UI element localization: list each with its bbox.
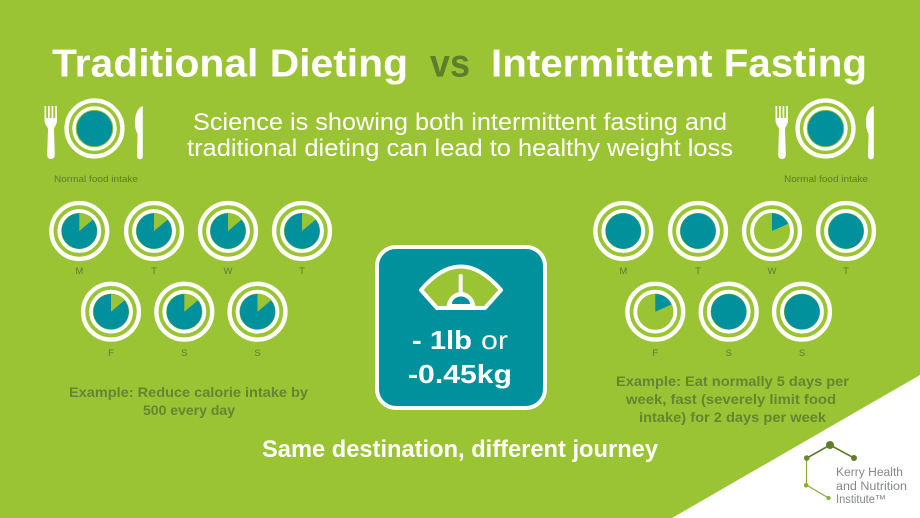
- logo text: and Nutrition: [836, 481, 907, 493]
- Tuesday plate: [126, 203, 182, 277]
- Friday fasting plate: [627, 284, 683, 359]
- Sunday plate: [230, 284, 285, 359]
- subtitle text: [187, 109, 733, 162]
- icon: right plate and cutlery: [776, 101, 874, 159]
- Wednesday plate: [200, 203, 256, 277]
- Thursday plate: T: [299, 266, 305, 277]
- Sunday plate: [774, 284, 830, 359]
- right example text: week, fast (severely limit food: [625, 391, 836, 407]
- panel: traditional dieting week: [51, 203, 330, 359]
- right example text: [616, 373, 850, 425]
- subtitle text: traditional dieting can lead to healthy weight loss: [187, 135, 733, 162]
- Monday plate: M: [619, 266, 627, 277]
- Monday plate: [595, 203, 651, 277]
- Saturday plate: S: [726, 348, 732, 359]
- logo mark: [804, 441, 857, 500]
- Tuesday plate: T: [695, 266, 701, 277]
- Thursday plate: [274, 203, 330, 277]
- title: [52, 42, 867, 86]
- Wednesday fasting plate: [744, 203, 800, 277]
- right normal food intake label: Normal food intake: [784, 174, 868, 185]
- Friday plate: F: [108, 348, 114, 359]
- title: Intermittent Fasting: [491, 42, 867, 86]
- weight loss value: -0.45kg: [408, 359, 512, 389]
- logo text: Kerry Health: [836, 467, 903, 479]
- logo: Kerry Health and Nutrition Institute: [804, 441, 907, 506]
- weight loss value: - 1lb: [412, 325, 472, 355]
- Friday fasting plate: F: [652, 348, 658, 359]
- Monday plate: [51, 203, 107, 277]
- Thursday plate: [818, 203, 874, 277]
- logo text: Institute™: [836, 494, 886, 506]
- Friday plate: [83, 284, 139, 359]
- title: Traditional Dieting: [52, 42, 408, 86]
- Wednesday fasting plate: W: [768, 266, 777, 277]
- icon: left plate and cutlery: [44, 101, 143, 159]
- Sunday plate: S: [254, 348, 261, 359]
- weight loss value: or: [481, 325, 508, 355]
- title: vs: [430, 42, 470, 86]
- tagline: Same destination, different journey: [262, 436, 659, 463]
- Monday plate: M: [75, 266, 83, 277]
- left normal food intake label: Normal food intake: [54, 174, 138, 185]
- right example text: intake) for 2 days per week: [639, 409, 826, 425]
- panel: weight loss scale: [377, 247, 545, 408]
- Tuesday plate: T: [151, 266, 157, 277]
- right example text: Example: Eat normally 5 days per: [616, 373, 850, 389]
- left example text: 500 every day: [143, 402, 235, 418]
- Thursday plate: T: [843, 266, 849, 277]
- left example text: [69, 384, 308, 418]
- left example text: Example: Reduce calorie intake by: [69, 384, 308, 400]
- Saturday plate: S: [181, 348, 187, 359]
- white corner triangle: [672, 375, 920, 518]
- panel: intermittent fasting week: [595, 203, 874, 359]
- Saturday plate: [156, 284, 212, 359]
- Wednesday plate: W: [224, 266, 233, 277]
- weight loss value: [408, 325, 512, 389]
- Saturday plate: [701, 284, 757, 359]
- Tuesday plate: [670, 203, 726, 277]
- logo text: [836, 467, 907, 506]
- Sunday plate: S: [799, 348, 805, 359]
- subtitle text: Science is showing both intermittent fasting and: [193, 109, 727, 136]
- icon: scale: [421, 266, 501, 308]
